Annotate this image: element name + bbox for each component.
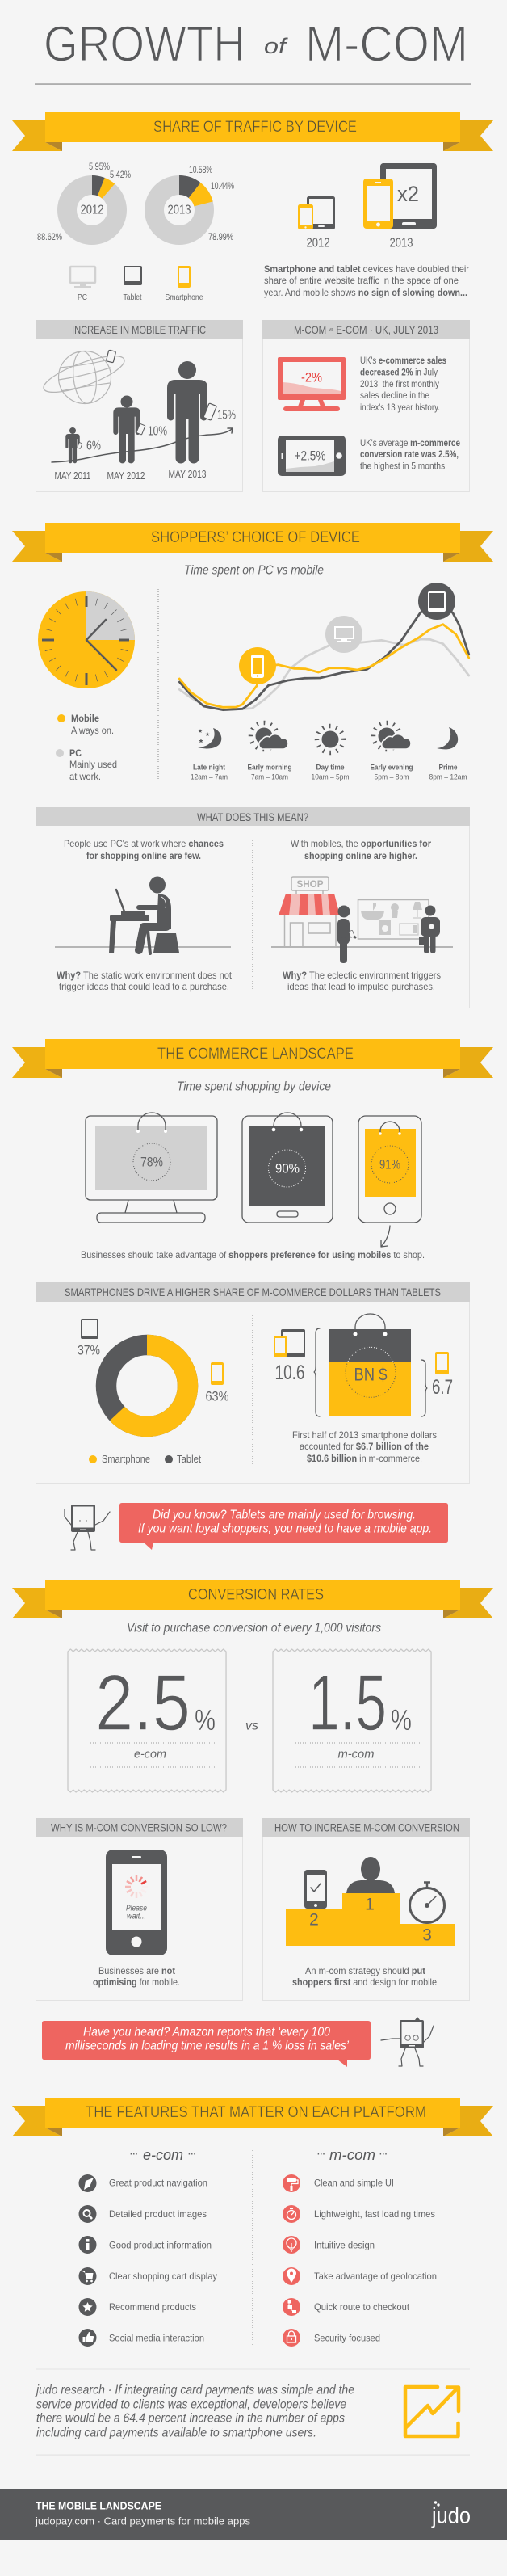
text block: optimising for mobile. — [93, 1976, 180, 1988]
column heading: m-com — [317, 2147, 388, 2163]
feature: recommend products: Recommend products — [109, 2301, 196, 2313]
section banner: shoppers' choice of device: SHOPPERS’ CHOICE OF DEVICE — [151, 529, 360, 546]
device: tablet 90% — [242, 1113, 333, 1223]
ticket: m-com 1.5%: m-com — [337, 1747, 375, 1762]
section banner: shoppers' choice of device — [12, 523, 493, 562]
text block: e-commerce sales: UK's e-commerce sales — [360, 355, 446, 366]
icon: day time — [316, 726, 344, 753]
donut chart: 2012 traffic share: 5.95% — [89, 162, 110, 172]
podium illustration: 2 — [309, 1910, 319, 1930]
legend: mobile vs PC: Always on. — [71, 725, 114, 736]
text block: first half of 2013: First half of 2013 smartphone dollars — [292, 1429, 437, 1441]
feature: social media interaction: Social media interaction — [109, 2332, 204, 2343]
callout: have you heard: milliseconds in loading time results in a 1 % loss in sales’ — [65, 2039, 349, 2052]
icon: globe with orbiting phone — [40, 349, 128, 405]
label: vs: vs — [245, 1719, 258, 1732]
text block: businesses advice: Businesses should take advantage of shoppers preference for using mobiles to shop. — [81, 1249, 425, 1261]
arrow to text — [381, 1226, 390, 1247]
column heading: e-com: e-com — [143, 2147, 183, 2163]
illustration: shop and window: SHOP — [297, 878, 323, 890]
time of day labels: 8pm – 12am — [429, 772, 467, 782]
ticket: m-com 1.5%: 1.5 — [308, 1658, 387, 1747]
text block — [93, 1965, 180, 1988]
section banner: the commerce landscape: THE COMMERCE LANDSCAPE — [157, 1046, 354, 1063]
callout: did you know: Did you know? Tablets are mainly used for browsing. — [153, 1508, 416, 1522]
icon: monitor with -2%: -2% — [301, 370, 322, 385]
trend arrow — [52, 428, 233, 462]
feature: security focused: Security focused — [314, 2332, 380, 2343]
text block: mobiles: With mobiles, the opportunities for — [291, 838, 431, 849]
date labels — [55, 469, 207, 482]
icon: 2013 devices doubled — [363, 163, 437, 250]
text block: first half of 2013: accounted for $6.7 billion of the — [300, 1441, 429, 1452]
clock chart — [38, 591, 135, 688]
column heading: e-com: ··· — [188, 2147, 196, 2160]
text block: PC at work: for shopping online are few. — [86, 850, 201, 861]
callout: did you know: If you want loyal shoppers, you need to have a mobile app. — [138, 1522, 432, 1535]
date labels: MAY 2012 — [107, 470, 145, 482]
text block: e-commerce sales: index's 13 year history. — [360, 402, 440, 413]
feature: quick route to checkout — [283, 2298, 410, 2316]
text block: m-commerce conversion — [360, 437, 460, 472]
icon: early morning — [250, 722, 288, 750]
icon: phone loading: Please — [126, 1904, 147, 1913]
ticket: m-com 1.5%: % — [391, 1703, 412, 1736]
ticket: e-com 2.5%: e-com — [134, 1747, 166, 1762]
feature: good product information — [79, 2236, 212, 2254]
icon: tablet and phone — [274, 1329, 305, 1384]
column heading: m-com: ··· — [379, 2147, 388, 2160]
text block: first half of 2013 — [292, 1429, 437, 1464]
time of day labels: 5pm – 8pm — [375, 772, 409, 782]
percent labels — [86, 409, 236, 452]
section banner: features that matter: THE FEATURES THAT MATTER ON EACH PLATFORM — [86, 2104, 426, 2121]
text block: PC at work — [64, 838, 224, 861]
panel: how to increase m-com conversion — [262, 1818, 470, 2001]
footer — [0, 2489, 507, 2540]
person: May 2012 — [113, 396, 145, 463]
column heading: e-com — [130, 2147, 196, 2163]
icon: phone loading: wait... — [127, 1912, 146, 1921]
text block: traffic summary — [264, 263, 469, 298]
feature: security focused — [283, 2329, 380, 2347]
legend: Smartphone — [102, 1454, 150, 1465]
heading: INCREASE IN MOBILE TRAFFIC — [72, 323, 206, 336]
device: monitor 78% — [86, 1113, 217, 1223]
icon: tablet with +2.5% — [278, 436, 346, 476]
bag chart: BN $ split — [329, 1314, 411, 1416]
character: tablet with glasses — [381, 2017, 434, 2066]
percent labels: 6% — [86, 440, 101, 452]
text block: e-commerce sales: sales decline in the — [360, 389, 429, 401]
ticket: e-com 2.5% — [68, 1649, 226, 1792]
time of day labels: 7am – 10am — [251, 772, 288, 782]
line chart: time spent by device — [179, 583, 469, 710]
icon: late night: ★ — [198, 737, 204, 745]
device: monitor 78%: 78% — [140, 1154, 163, 1170]
person: May 2013 — [167, 361, 216, 464]
callout: have you heard — [42, 2021, 371, 2067]
donut chart: 2012 traffic share: 5.42% — [110, 170, 131, 180]
feature: clear shopping cart display: Clear shopping cart display — [109, 2271, 217, 2282]
donut chart: 2013 traffic share: 10.58% — [189, 166, 212, 175]
donut chart: smartphone vs tablet: 63% — [205, 1388, 229, 1404]
icon: smartphone with 6.7 — [432, 1352, 453, 1399]
footer: judopay.com · Card payments for mobile apps — [35, 2515, 250, 2528]
text block: e-commerce sales — [360, 355, 446, 413]
column heading: m-com: m-com — [329, 2147, 375, 2163]
callout: have you heard: Have you heard? Amazon reports that ‘every 100 — [83, 2025, 330, 2039]
text block: mobiles: shopping online are higher. — [304, 850, 417, 861]
time of day labels: Late night — [193, 763, 226, 772]
feature: intuitive design: Intuitive design — [314, 2240, 375, 2251]
donut chart: 2013 traffic share — [154, 166, 234, 242]
legend: mobile vs PC — [56, 713, 117, 782]
text block: why eclectic: ideas that lead to impulse purchases. — [287, 981, 435, 992]
title — [44, 16, 468, 73]
legend: device types: Smartphone — [165, 293, 203, 302]
podium illustration: 3 — [422, 1926, 432, 1944]
legend: device types — [70, 266, 203, 302]
text block: why eclectic: Why? The eclectic environment triggers — [283, 970, 441, 981]
icon: late night — [198, 728, 221, 748]
panel: what does this mean — [36, 807, 470, 1008]
text block: shoppers first and design for mobile. — [292, 1976, 439, 1988]
icon: early evening — [373, 722, 411, 750]
text block: judo research: service provided to clients was exceptional, developers believe — [36, 2398, 346, 2411]
section banner: features that matter — [12, 2098, 493, 2136]
legend: mobile vs PC: Mobile — [71, 713, 99, 724]
donut chart: 2012 traffic share: 88.62% — [37, 233, 62, 242]
icon: 2012 devices — [298, 196, 335, 250]
section banner: share of traffic by device — [12, 112, 493, 151]
feature: clean and simple UI — [283, 2174, 394, 2192]
section banner: conversion rates: CONVERSION RATES — [188, 1587, 324, 1603]
text block: judo research: including card payments available to smartphone users. — [36, 2426, 316, 2440]
text block: traffic summary: year. And mobile shows no sign of slowing down... — [264, 287, 467, 298]
bag chart: BN $ split: BN $ — [354, 1364, 388, 1385]
device: tablet 90%: 90% — [275, 1160, 300, 1176]
feature: lightweight fast loading: Lightweight, fast loading times — [314, 2208, 435, 2220]
podium illustration — [286, 1857, 455, 1946]
donut chart: smartphone vs tablet — [78, 1319, 229, 1427]
text block: why static: trigger ideas that could lead to a purchase. — [59, 981, 229, 992]
feature: social media interaction — [79, 2329, 204, 2347]
ticket: e-com 2.5%: % — [195, 1703, 216, 1736]
heading: WHY IS M-COM CONVERSION SO LOW? — [51, 1821, 227, 1834]
legend: mobile vs PC: at work. — [69, 771, 101, 782]
column heading: m-com: ··· — [317, 2147, 325, 2160]
marker: PC — [325, 616, 362, 653]
marker: tablet — [418, 583, 455, 620]
spinner — [125, 1875, 148, 1898]
device: phone 91% — [358, 1116, 421, 1223]
icon: tablet with +2.5%: +2.5% — [294, 448, 326, 464]
icon: prime time — [437, 727, 458, 749]
icon: 2013 devices doubled: x2 — [397, 182, 419, 206]
icon: smartphone with 6.7: 6.7 — [432, 1376, 453, 1399]
legend: mobile vs PC: Mainly used — [69, 759, 117, 770]
text block: why eclectic — [283, 970, 441, 992]
date labels: MAY 2013 — [168, 469, 207, 480]
title: of — [264, 34, 288, 58]
feature: good product information: Good product information — [109, 2240, 212, 2251]
feature: clear shopping cart display — [79, 2267, 217, 2285]
feature: quick route to checkout: Quick route to checkout — [314, 2301, 410, 2313]
donut chart: 2013 traffic share: 10.44% — [211, 182, 234, 192]
text block — [292, 1965, 439, 1988]
feature: clean and simple UI: Clean and simple UI — [314, 2177, 394, 2188]
icon: late night: ★ — [205, 731, 210, 738]
text block: Businesses are not — [98, 1965, 175, 1976]
heading: HOW TO INCREASE M-COM CONVERSION — [274, 1821, 459, 1834]
text block: An m-com strategy should put — [305, 1965, 425, 1976]
time of day labels: Early evening — [370, 763, 413, 772]
person: May 2011 — [65, 427, 82, 463]
ticket: e-com 2.5%: 2.5 — [95, 1658, 191, 1747]
logo: judo: judo — [431, 2503, 471, 2528]
panel: why is m-com conversion so low — [36, 1818, 243, 2001]
panel: smartphones drive higher share — [36, 1282, 470, 1484]
text block: traffic summary: Smartphone and tablet devices have doubled their — [264, 263, 469, 275]
feature: detailed product images — [79, 2205, 207, 2223]
feature: great product navigation: Great product navigation — [109, 2177, 207, 2188]
section banner: the commerce landscape — [12, 1039, 493, 1078]
text block: m-commerce conversion: the highest in 5 months. — [360, 461, 447, 472]
text block: m-commerce conversion: conversion rate was 2.5%, — [360, 448, 459, 460]
subtitle: Time spent shopping by device — [177, 1080, 331, 1094]
feature: intuitive design — [283, 2236, 375, 2254]
subtitle: Time spent on PC vs mobile — [184, 564, 324, 577]
text block: m-commerce conversion: UK's average m-commerce — [360, 437, 460, 448]
ticket: m-com 1.5% — [273, 1649, 431, 1792]
text block: why static: Why? The static work environment does not — [57, 970, 233, 981]
time of day labels: Early morning — [247, 763, 292, 772]
column heading: e-com: ··· — [130, 2147, 138, 2160]
feature: great product navigation — [79, 2174, 207, 2192]
feature: recommend products — [79, 2298, 196, 2316]
donut chart: 2013 traffic share: 78.99% — [208, 233, 233, 242]
icon: 2013 devices doubled: 2013 — [389, 236, 413, 250]
donut chart: smartphone vs tablet: 37% — [78, 1343, 100, 1357]
percent labels: 15% — [217, 409, 236, 422]
heading: M-COM vs E-COM · UK, JULY 2013 — [294, 323, 438, 336]
percent labels: 10% — [148, 425, 167, 438]
text block: first half of 2013: $10.6 billion in m-commerce. — [307, 1453, 422, 1464]
feature: geolocation — [283, 2267, 437, 2285]
text block: mobiles — [291, 838, 431, 861]
illustration: shop and window — [271, 877, 453, 963]
time of day labels: Day time — [316, 763, 344, 772]
device: phone 91%: 91% — [379, 1157, 400, 1172]
donut chart: 2012 traffic share — [37, 162, 131, 242]
section banner: share of traffic by device: SHARE OF TRAFFIC BY DEVICE — [153, 119, 357, 136]
feature: detailed product images: Detailed product images — [109, 2208, 207, 2220]
callout: did you know — [119, 1503, 448, 1550]
podium illustration: 1 — [365, 1896, 375, 1913]
time of day labels: Prime — [439, 763, 457, 772]
icon: tablet and phone: 10.6 — [274, 1362, 305, 1384]
legend: mobile vs PC: PC — [69, 747, 82, 759]
icon: growth chart — [405, 2387, 459, 2436]
title: M-COM — [305, 16, 468, 73]
time of day labels — [191, 763, 467, 782]
text block: judo research: there would be a 64.4 percent increase in the number of apps — [36, 2411, 345, 2426]
donut chart: 2013 traffic share: 2013 — [168, 204, 191, 217]
icon: phone loading — [106, 1850, 167, 1955]
marker: mobile — [239, 647, 276, 684]
legend — [89, 1454, 201, 1465]
donut chart: 2012 traffic share: 2012 — [81, 204, 103, 217]
brace: total — [314, 1328, 320, 1416]
text block: judo research: judo research · If integrating card payments was simple and the — [35, 2384, 354, 2397]
feature: lightweight fast loading — [283, 2205, 435, 2223]
panel: increase in mobile traffic — [36, 320, 243, 491]
brace: smartphone — [421, 1360, 427, 1416]
icon: monitor with -2% — [278, 357, 346, 411]
heading: WHAT DOES THIS MEAN? — [197, 810, 308, 823]
text block: why static — [57, 970, 233, 992]
section banner: conversion rates — [12, 1580, 493, 1618]
text block: PC at work: People use PC's at work where chances — [64, 838, 224, 849]
footer: THE MOBILE LANDSCAPE — [36, 2500, 161, 2511]
icon: 2012 devices: 2012 — [307, 236, 330, 250]
subtitle: Visit to purchase conversion of every 1,000 visitors — [127, 1621, 381, 1635]
panel: m-com vs e-com UK — [262, 320, 470, 491]
time of day labels: 10am – 5pm — [312, 772, 350, 782]
time of day labels: 12am – 7am — [191, 772, 228, 782]
text block: e-commerce sales: 2013, the first monthly — [360, 378, 439, 389]
feature: geolocation: Take advantage of geolocation — [314, 2271, 437, 2282]
date labels: MAY 2011 — [55, 470, 91, 482]
title: GROWTH — [44, 16, 245, 73]
legend: device types: PC — [78, 293, 87, 302]
text block: traffic summary: share of entire website traffic in the space of one — [264, 275, 459, 286]
illustration: person at desk — [55, 876, 231, 953]
text block: judo research — [35, 2384, 354, 2440]
legend: device types: Tablet — [123, 293, 142, 302]
legend: Tablet — [177, 1454, 201, 1465]
icon: late night: ★ — [198, 728, 203, 734]
character: tablet — [65, 1505, 110, 1550]
text block: e-commerce sales: decreased 2% in July — [360, 367, 438, 378]
